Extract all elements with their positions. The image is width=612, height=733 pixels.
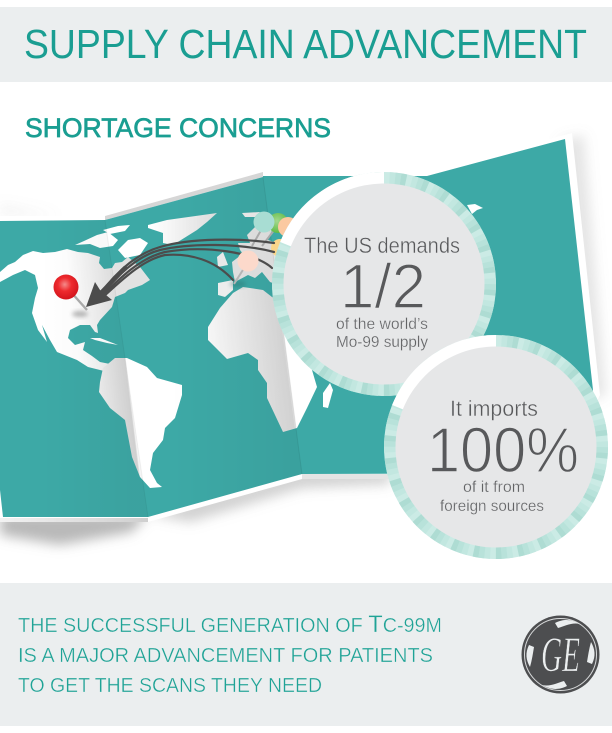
callout circle: imports <box>384 335 608 559</box>
text: foreign sources: foreign sources <box>440 498 544 515</box>
GE logo <box>522 616 600 694</box>
text: The US demands: The US demands <box>304 233 460 258</box>
text: It imports: It imports <box>450 396 538 421</box>
fold shading <box>0 220 148 517</box>
map pins: European suppliers <box>252 212 298 257</box>
callout circle: US demand <box>272 172 496 396</box>
header band <box>0 7 612 82</box>
continents <box>0 204 483 488</box>
South America <box>99 358 182 488</box>
arrowhead <box>86 282 112 307</box>
GE logo: GE <box>541 626 580 682</box>
footer text: IS A MAJOR ADVANCEMENT FOR PATIENTS <box>18 645 433 667</box>
Europe <box>242 212 260 217</box>
text: Mo-99 supply: Mo-99 supply <box>336 334 428 351</box>
arrows to the US <box>86 240 274 307</box>
folded world map <box>0 133 606 545</box>
peach pin <box>230 250 258 287</box>
footer text: THE SUCCESSFUL GENERATION OF TC-99M <box>18 611 442 638</box>
Africa <box>208 287 330 432</box>
text: of the world's: of the world’s <box>336 316 428 333</box>
Greenland <box>148 213 217 245</box>
red pin: United States <box>54 274 88 317</box>
number: 1/2: 1/2 <box>340 252 426 322</box>
footer band <box>0 583 612 726</box>
number: 100%: 100% <box>427 414 579 486</box>
footer text: TO GET THE SCANS THEY NEED <box>18 675 322 697</box>
footer text <box>18 611 442 697</box>
text: of it from: of it from <box>463 479 525 496</box>
heading: shortage concerns: SHORTAGE CONCERNS <box>25 113 331 143</box>
North America <box>0 249 150 371</box>
